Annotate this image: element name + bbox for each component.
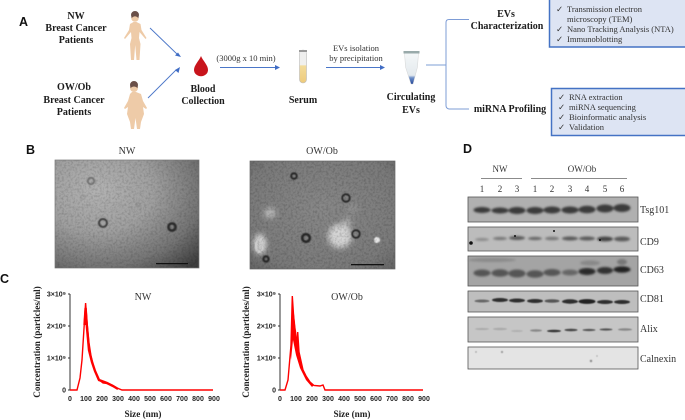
text: EVs isolation: EVs isolation bbox=[333, 43, 380, 53]
heading: OW/Ob TEM: OW/Ob bbox=[306, 146, 338, 157]
arrow: blood to serum bbox=[220, 65, 280, 70]
chart: NW size distribution: 200 bbox=[96, 396, 108, 403]
TEM image NW bbox=[55, 160, 199, 268]
chart: NW size distribution: 600 bbox=[160, 396, 172, 403]
text: OW/Ob breast cancer patients: OW/Ob bbox=[57, 82, 91, 93]
chart: NW size distribution: Concentration (particles/ml) bbox=[32, 286, 42, 398]
blot: Alix bbox=[468, 317, 658, 342]
blot: CD63: CD63 bbox=[640, 265, 664, 276]
box: miRNA methods bbox=[552, 88, 685, 136]
blot lane headers: NW bbox=[492, 164, 508, 174]
box: characterization methods: ✓ bbox=[556, 24, 563, 34]
chart: OW/Ob size distribution: 1×10⁹ bbox=[257, 356, 276, 362]
text: NW breast cancer patients bbox=[45, 11, 107, 46]
box: miRNA methods: ✓ bbox=[558, 122, 565, 132]
text: NW breast cancer patients: Breast Cancer bbox=[45, 23, 107, 34]
chart: OW/Ob size distribution: 400 bbox=[338, 396, 350, 403]
blot: CD81 bbox=[468, 291, 664, 312]
chart: OW/Ob size distribution bbox=[241, 286, 430, 419]
text: blood collection bbox=[181, 84, 225, 107]
chart: OW/Ob size distribution: Size (nm) bbox=[334, 409, 370, 419]
chart: OW/Ob size distribution: 100 bbox=[290, 396, 302, 403]
icon: EV tube bbox=[404, 51, 420, 84]
icon: serum tube bbox=[299, 50, 307, 83]
box: characterization methods: Transmission electron bbox=[567, 4, 643, 14]
text: blood collection: Collection bbox=[181, 96, 225, 107]
chart: NW size distribution: 500 bbox=[144, 396, 156, 403]
chart: OW/Ob size distribution: 600 bbox=[370, 396, 382, 403]
chart: NW size distribution: 400 bbox=[128, 396, 140, 403]
text: NW breast cancer patients: Patients bbox=[59, 35, 93, 46]
chart: OW/Ob size distribution: 0 bbox=[272, 388, 276, 394]
chart: NW size distribution: NW bbox=[135, 292, 152, 303]
chart: NW size distribution: 0 bbox=[62, 388, 66, 394]
icon: blood drop bbox=[194, 56, 208, 76]
box: characterization methods: ✓ bbox=[556, 4, 563, 14]
box: miRNA methods: miRNA sequencing bbox=[569, 102, 637, 112]
chart: NW size distribution: 800 bbox=[192, 396, 204, 403]
blot: CD63 bbox=[468, 256, 664, 286]
blot lane headers: 1 bbox=[480, 184, 484, 194]
box: miRNA methods: ✓ bbox=[558, 92, 565, 102]
panel label C: C bbox=[0, 272, 9, 286]
chart: OW/Ob size distribution: 3×10⁹ bbox=[257, 292, 276, 298]
heading: EVs characterization: EVs bbox=[497, 9, 515, 20]
chart: NW size distribution bbox=[32, 286, 220, 419]
blot lane headers: OW/Ob bbox=[568, 164, 597, 174]
box: miRNA methods: Bioinformatic analysis bbox=[569, 112, 646, 122]
box: miRNA methods: Validation bbox=[569, 122, 605, 132]
box: miRNA methods: RNA extraction bbox=[569, 92, 623, 102]
panel label B: B bbox=[26, 143, 35, 157]
bracket connector bbox=[426, 20, 469, 109]
text: OW/Ob breast cancer patients bbox=[43, 82, 105, 118]
chart: NW size distribution: 700 bbox=[176, 396, 188, 403]
blot lane headers: 3 bbox=[568, 184, 573, 194]
text: EVs isolation bbox=[329, 43, 384, 63]
chart: OW/Ob size distribution: 900 bbox=[418, 396, 430, 403]
box: miRNA methods: ✓ bbox=[558, 102, 565, 112]
chart: NW size distribution: 100 bbox=[80, 396, 92, 403]
panel label A: A bbox=[19, 15, 28, 29]
blot lane headers bbox=[480, 164, 627, 194]
chart: NW size distribution: 0 bbox=[68, 396, 72, 403]
chart: OW/Ob size distribution: 800 bbox=[402, 396, 414, 403]
chart: NW size distribution: 3×10⁹ bbox=[47, 292, 66, 298]
chart: NW size distribution: 2×10⁹ bbox=[47, 324, 66, 330]
chart: OW/Ob size distribution: Concentration (particles/ml) bbox=[241, 286, 251, 398]
text: OW/Ob breast cancer patients: Patients bbox=[57, 107, 91, 118]
chart: NW size distribution: 1×10⁹ bbox=[47, 356, 66, 362]
blot lane headers: 1 bbox=[533, 184, 537, 194]
chart: OW/Ob size distribution: OW/Ob bbox=[331, 292, 363, 303]
text: EVs isolation: by precipitation bbox=[329, 53, 384, 63]
box: characterization methods: Nano Tracking Analysis (NTA) bbox=[567, 24, 674, 34]
arrow: NW to blood bbox=[150, 28, 181, 57]
arrow: serum to EVs bbox=[326, 65, 385, 70]
blot lane headers: 2 bbox=[498, 184, 502, 194]
box: miRNA methods: ✓ bbox=[558, 112, 565, 122]
blot lane headers: 3 bbox=[515, 184, 520, 194]
chart: OW/Ob size distribution: 500 bbox=[354, 396, 366, 403]
blot: CD81: CD81 bbox=[640, 294, 664, 305]
text: blood collection: Blood bbox=[190, 84, 216, 95]
box: characterization methods: Immunoblotting bbox=[567, 34, 623, 44]
panel label D: D bbox=[463, 142, 472, 156]
TEM image OW/Ob bbox=[250, 161, 395, 269]
chart: NW size distribution: 300 bbox=[112, 396, 124, 403]
blot: Tsg101: Tsg101 bbox=[640, 205, 669, 216]
chart: NW size distribution: Size (nm) bbox=[124, 409, 162, 419]
text: OW/Ob breast cancer patients: Breast Cancer bbox=[43, 95, 105, 106]
icon: OW/Ob body figure bbox=[124, 81, 147, 129]
blot lane headers: 4 bbox=[585, 184, 590, 194]
chart: OW/Ob size distribution: 300 bbox=[322, 396, 334, 403]
blot lane headers: 5 bbox=[603, 184, 608, 194]
text: NW breast cancer patients: NW bbox=[67, 11, 85, 22]
blot lane headers: 6 bbox=[620, 184, 625, 194]
heading: NW TEM: NW bbox=[119, 146, 136, 157]
chart: NW size distribution: 900 bbox=[208, 396, 220, 403]
text: circulating EVs: Circulating bbox=[387, 92, 435, 103]
chart: OW/Ob size distribution: 200 bbox=[306, 396, 318, 403]
arrow: OW/Ob to blood bbox=[148, 67, 180, 98]
chart: OW/Ob size distribution: 700 bbox=[386, 396, 398, 403]
chart: OW/Ob size distribution: 2×10⁹ bbox=[257, 324, 276, 330]
blot: Tsg101 bbox=[468, 197, 669, 222]
blot: CD9: CD9 bbox=[640, 237, 659, 248]
blot: Alix: Alix bbox=[640, 324, 658, 335]
text: circulating EVs: EVs bbox=[402, 105, 420, 116]
text: circulating EVs bbox=[387, 92, 435, 116]
heading: EVs characterization: Characterization bbox=[471, 21, 544, 32]
icon: NW body figure bbox=[124, 11, 146, 60]
heading: miRNA profiling: miRNA Profiling bbox=[474, 104, 546, 115]
blot: Calnexin: Calnexin bbox=[640, 354, 676, 365]
blot: CD9 bbox=[468, 227, 659, 251]
box: characterization methods: microscopy (TEM) bbox=[567, 14, 633, 24]
blot lane headers: 2 bbox=[550, 184, 554, 194]
box: characterization methods bbox=[550, 0, 685, 47]
chart: OW/Ob size distribution: 0 bbox=[278, 396, 282, 403]
heading: EVs characterization bbox=[471, 9, 544, 32]
box: characterization methods: ✓ bbox=[556, 34, 563, 44]
text: centrifugation: (3000g x 10 min) bbox=[216, 53, 276, 63]
blot: Calnexin bbox=[468, 347, 676, 369]
text: serum: Serum bbox=[289, 95, 318, 106]
